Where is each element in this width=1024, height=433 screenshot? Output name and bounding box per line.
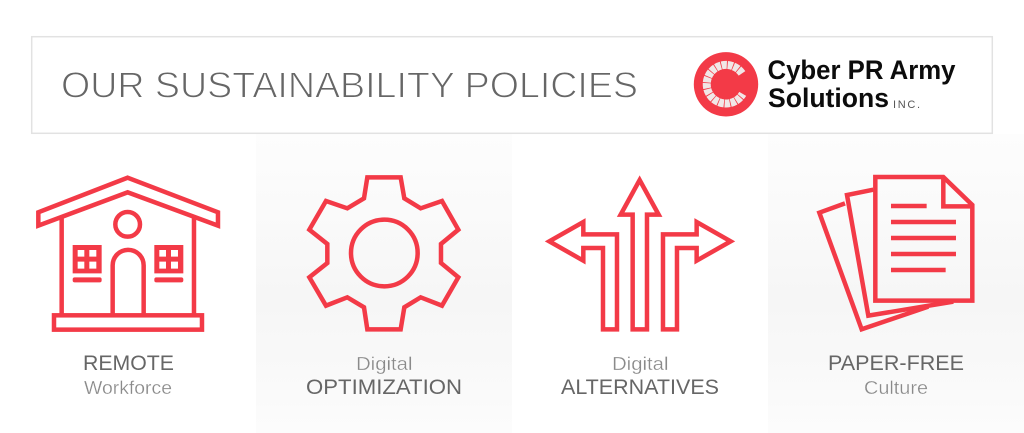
label: digital alternatives bbox=[561, 353, 719, 399]
gear outline bbox=[309, 177, 458, 329]
arrow right bbox=[663, 222, 731, 329]
label: digital optimization bbox=[306, 353, 462, 399]
house base bbox=[54, 315, 202, 330]
heading: OPTIMIZATION bbox=[306, 376, 462, 399]
title: OUR SUSTAINABILITY POLICIES bbox=[61, 64, 638, 106]
subheading: Digital bbox=[612, 353, 668, 374]
icon: paper stack bbox=[819, 177, 972, 329]
logo text INC: INC. bbox=[893, 99, 920, 111]
logo text line one: Cyber PR Army bbox=[768, 55, 956, 85]
house left window bbox=[73, 245, 102, 273]
icon: house bbox=[38, 178, 218, 330]
header box bbox=[32, 37, 992, 133]
heading: PAPER-FREE bbox=[828, 352, 964, 375]
back sheet bbox=[819, 203, 928, 329]
icon: gear bbox=[309, 177, 458, 329]
middle sheet bbox=[847, 190, 953, 316]
front sheet bbox=[875, 177, 972, 301]
house door bbox=[113, 250, 144, 315]
logo text line two: Solutions bbox=[768, 83, 889, 113]
house walls bbox=[62, 218, 194, 315]
subheading: Digital bbox=[356, 353, 412, 374]
subheading: Culture bbox=[864, 377, 928, 398]
label: remote workforce bbox=[83, 352, 174, 398]
logo icon: red circle with segmented C bbox=[694, 52, 758, 116]
house round window bbox=[115, 212, 140, 237]
icon: three arrows bbox=[549, 180, 731, 329]
logo: Cyber PR Army Solutions bbox=[694, 52, 956, 116]
house right window bbox=[154, 245, 183, 273]
house right sill bbox=[154, 277, 183, 282]
page fold bbox=[943, 177, 972, 206]
panel: background paper-free column bbox=[768, 134, 1024, 433]
arrow up bbox=[621, 180, 659, 329]
heading: REMOTE bbox=[83, 352, 174, 375]
panel: background optimization column bbox=[256, 134, 512, 433]
arrow left bbox=[549, 222, 617, 329]
gear hub bbox=[351, 220, 418, 286]
house roof bbox=[38, 178, 218, 226]
subheading: Workforce bbox=[84, 377, 172, 398]
house left sill bbox=[73, 277, 102, 282]
heading: ALTERNATIVES bbox=[561, 376, 719, 399]
label: paper-free culture bbox=[828, 352, 964, 398]
text lines bbox=[891, 206, 956, 270]
